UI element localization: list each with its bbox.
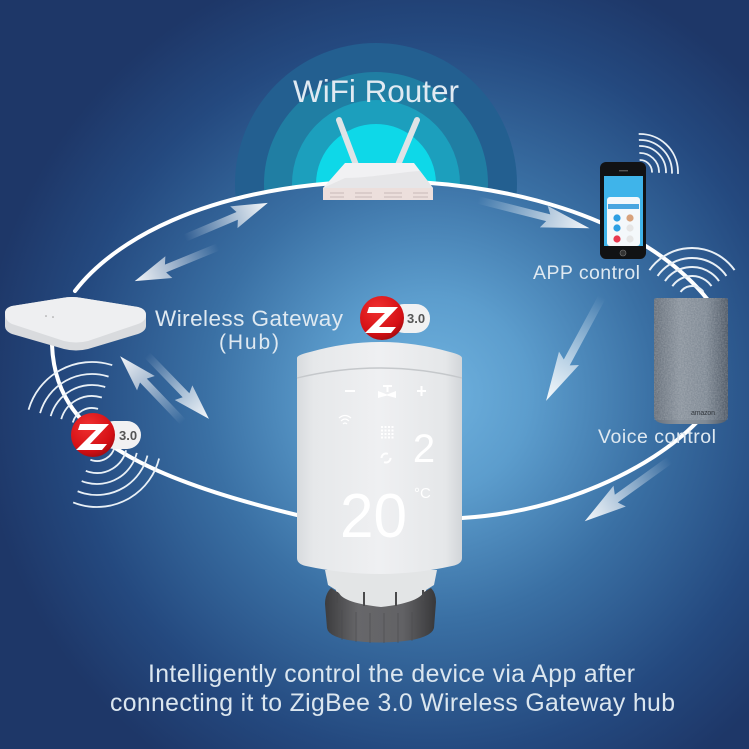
label: APP control: APP control <box>533 262 640 284</box>
arrow: gateway to router <box>181 192 272 248</box>
thermostat device <box>297 342 462 643</box>
caption: connecting it to ZigBee 3.0 Wireless Gateway hub <box>110 690 675 717</box>
arrow: gateway to thermostat <box>139 347 217 427</box>
plus <box>417 386 426 396</box>
icon: smart speaker: amazon <box>691 410 715 417</box>
caption <box>110 661 675 717</box>
badge: ZigBee 3.0 left: 3.0 <box>119 428 137 443</box>
icon: speaker signal waves <box>620 228 749 372</box>
control icons <box>339 385 426 462</box>
collar <box>325 570 437 608</box>
small digit display: 2 <box>413 427 435 471</box>
unit: °C <box>414 485 431 502</box>
label: Wireless Gateway (Hub): (Hub) <box>219 331 279 354</box>
main temperature display: 20 <box>340 482 407 551</box>
arrow: router to gateway <box>130 236 222 292</box>
icon: phone with app <box>600 162 646 259</box>
arrow: speaker to thermostat <box>578 450 677 531</box>
connection ring <box>52 181 708 518</box>
wifi signal rings <box>235 43 517 196</box>
icon: wifi <box>339 416 351 424</box>
label: Voice control: Voice control <box>598 426 716 448</box>
minus <box>345 390 355 392</box>
icon: refresh <box>382 454 390 462</box>
label: Wireless Gateway (Hub) <box>155 306 344 354</box>
badge: ZigBee 3.0 top <box>360 296 430 340</box>
badge: ZigBee 3.0 left <box>71 413 141 457</box>
icon: gateway hub <box>5 297 146 350</box>
icon: phone signal waves <box>601 133 679 211</box>
icon: valve <box>378 385 396 398</box>
icon: dots grid <box>381 427 395 438</box>
icon: gateway signal waves lower <box>19 365 175 521</box>
arrow: router to phone <box>475 189 592 239</box>
arrow: thermostat to gateway <box>112 348 191 430</box>
icon: smart speaker <box>654 298 728 424</box>
housing groove <box>297 368 462 378</box>
title: WiFi Router: WiFi Router <box>293 73 459 109</box>
icon: router <box>323 120 433 200</box>
caption: Intelligently control the device via App after <box>148 661 635 688</box>
knob <box>325 588 436 643</box>
arrow: phone to thermostat <box>535 291 613 407</box>
icon: gateway signal waves upper <box>10 346 174 510</box>
label: Wireless Gateway (Hub): Wireless Gateway <box>155 306 344 331</box>
badge: ZigBee 3.0 top: 3.0 <box>407 311 425 326</box>
housing <box>297 342 462 574</box>
